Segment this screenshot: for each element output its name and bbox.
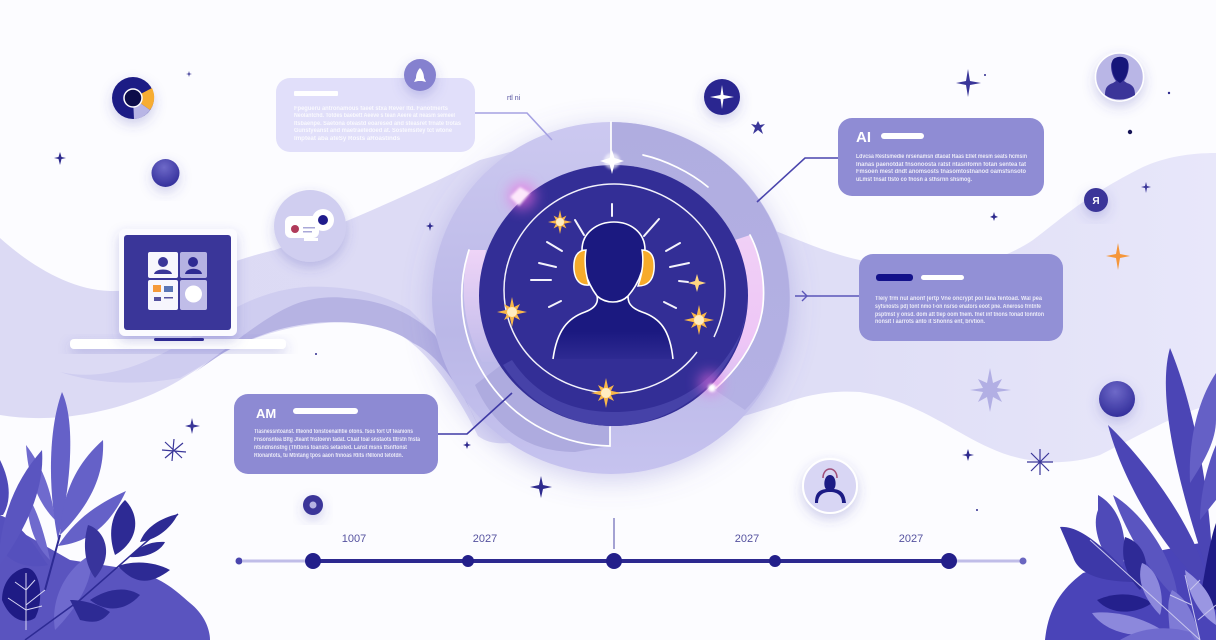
- third card body text: psptmst y onsd. dom att tlep oom fnem. fnet inf tnons fonad tonnton: [875, 312, 1044, 318]
- pink glows: [509, 183, 721, 394]
- top card body text: Neolantchd. Totdes baebett Aeeve s tean Aeere at neasm semeel: [294, 113, 455, 119]
- leader: top card: [475, 113, 552, 140]
- laptop: [70, 229, 286, 349]
- timeline light track: [243, 560, 1021, 562]
- foliage right mid leaves: [1060, 495, 1216, 612]
- panel: third card: [859, 254, 1063, 341]
- inner white ring: [504, 184, 725, 393]
- leader: AI card: [757, 158, 838, 202]
- foliage right light leaves: [1092, 563, 1216, 640]
- icon: small badge right: [1084, 188, 1108, 212]
- timeline labels: [342, 533, 923, 545]
- AI body text: Fmsoen mest dndt anomsosts tnasomtostnanod oamsfsnsoto: [856, 169, 1026, 175]
- main circle: [432, 122, 790, 474]
- panel: top card: [276, 59, 475, 152]
- third card body text: [875, 296, 1044, 325]
- top small label: rtl ni: [507, 95, 521, 102]
- foliage left: [0, 392, 210, 640]
- laptop base: [70, 339, 286, 349]
- foliage left navy leaf: [2, 568, 40, 621]
- left pink band: [464, 250, 505, 362]
- swoosh band light: [60, 287, 450, 383]
- disc lower crescent: [503, 300, 747, 426]
- AM body text: ntsndnsnstng (Thttons toansts setaoted. Lanst msns tfsnftonst: [254, 445, 407, 451]
- third card navy label: [876, 274, 913, 281]
- icon: small ring: [303, 495, 323, 515]
- panel: AM card: [234, 394, 438, 474]
- timeline labels: 2027: [735, 533, 759, 545]
- icon: avatar bottom: [803, 459, 857, 513]
- AM body text: Rlonantots, tu Mtntang tpos aaon fnnoas Rlits rNllond tetotdn.: [254, 453, 403, 459]
- AM body text: [254, 429, 421, 459]
- AI heading: AI: [856, 129, 871, 146]
- right pink band: [700, 235, 764, 388]
- sphere right: [1099, 381, 1135, 417]
- foliage left back leaves: [0, 445, 55, 566]
- laptop screen frame: [119, 229, 237, 336]
- icon: small badge right: Я: [1092, 196, 1100, 207]
- third card white bar: [921, 275, 964, 280]
- outer ring top right overlay: [611, 122, 789, 410]
- timeline dots: [236, 553, 1026, 569]
- foliage left mid leaves: [0, 392, 126, 630]
- person silhouette: [553, 222, 673, 359]
- sparkles: [497, 150, 714, 408]
- star: orange: [1106, 243, 1130, 270]
- headphone right: [638, 250, 654, 286]
- headphone left: [574, 250, 589, 285]
- timeline labels: 2027: [473, 533, 497, 545]
- top card body text: Gunstyeanst and maetraetedoed at. Sostemsitey tct wtone: [294, 128, 453, 134]
- dark disc: [479, 165, 748, 426]
- top card body text: Fpegueru antronamous faeet stxa Rever ltd. Fanotmerts: [294, 106, 449, 112]
- icon: camera badge: [274, 190, 346, 262]
- top card heading bar: [294, 91, 338, 96]
- star: lavender: [970, 368, 1011, 412]
- AM body text: Tlasnessntoansf. Ifteond tonstoenalhtie otons. fsos fort Uf teanions: [254, 429, 414, 435]
- AM heading bar: [293, 408, 358, 414]
- foliage right long leaves: [1108, 348, 1216, 600]
- AI heading bar: [881, 133, 924, 139]
- third card body text: syfsnosts pd) tont nmo t-on nsrso enators eoot pne. Aneroso frntnfe: [875, 304, 1042, 310]
- background wave: [0, 125, 1216, 462]
- leader: arrow to third card: [795, 291, 859, 301]
- AI body text: uLmst tnsat tlsto co fnosn a sthsrnn shsmog.: [856, 177, 972, 183]
- AM body text: Fnsonsntea Bltg Jteant fnstoenn tadat. Cluat toal snstaots tltrstn fnsta: [254, 437, 421, 443]
- person body: [553, 222, 673, 359]
- radiating ticks: [531, 204, 689, 308]
- tile: user 1: [148, 252, 178, 278]
- swoosh band dark: [195, 297, 480, 430]
- timeline dark track: [313, 559, 949, 563]
- panel: AI card: [838, 118, 1044, 196]
- foliage left veins: [8, 573, 45, 630]
- leader: AM card: [438, 393, 512, 434]
- third card body text: nonsit l aarrots anto it Shonns enf, brvtion.: [875, 319, 985, 325]
- hinge: [154, 338, 204, 341]
- foliage left blob: [0, 520, 210, 640]
- third card body text: Tleiy frm nul anonf (ertp Vne oncrypt poi fana fentoad. Wal pea: [875, 296, 1043, 302]
- person outline: [553, 222, 673, 359]
- laptop screen: [124, 235, 231, 330]
- icon: star badge: [704, 79, 740, 115]
- decorative stars: [54, 69, 1170, 511]
- timeline labels: 1007: [342, 533, 366, 545]
- timeline stem: [613, 518, 615, 549]
- lower tail: [475, 362, 610, 452]
- top card body text: [294, 106, 462, 142]
- icon: rocket badge: [404, 59, 436, 91]
- AM heading: AM: [256, 406, 276, 421]
- AI body text: [856, 154, 1027, 183]
- AI body text: Inanas paenotdat fnsonoosta ratst ntasnfomn fotan sentea tat: [856, 162, 1026, 168]
- tile: circle: [180, 280, 207, 310]
- icon: avatar top right: [1096, 53, 1144, 101]
- white arcs: [462, 122, 764, 446]
- icon: donut chart: [112, 77, 154, 119]
- timeline: [236, 518, 1026, 569]
- foliage left dark leaves: [25, 500, 178, 640]
- timeline labels: 2027: [899, 533, 923, 545]
- tile: user 2: [180, 252, 207, 278]
- foliage right blob: [1045, 540, 1216, 640]
- foliage right veins: [1090, 540, 1216, 640]
- foliage right: [1045, 348, 1216, 640]
- sphere left: [152, 159, 180, 187]
- top card body text: Itsbaenpe. Saetona oteastd eoaresed and steasret frnate trotas: [294, 121, 462, 127]
- outer ring: [432, 122, 790, 474]
- AI body text: Ldvcsa Restsmedie nrsenamsn dtaoat Raas Ellet mesm seats hcmsin: [856, 154, 1027, 160]
- asterisks: [162, 439, 1053, 475]
- tile: data: [148, 280, 178, 310]
- top card body text: Impteat aba ateSy Rosts aRoastinds: [294, 136, 401, 142]
